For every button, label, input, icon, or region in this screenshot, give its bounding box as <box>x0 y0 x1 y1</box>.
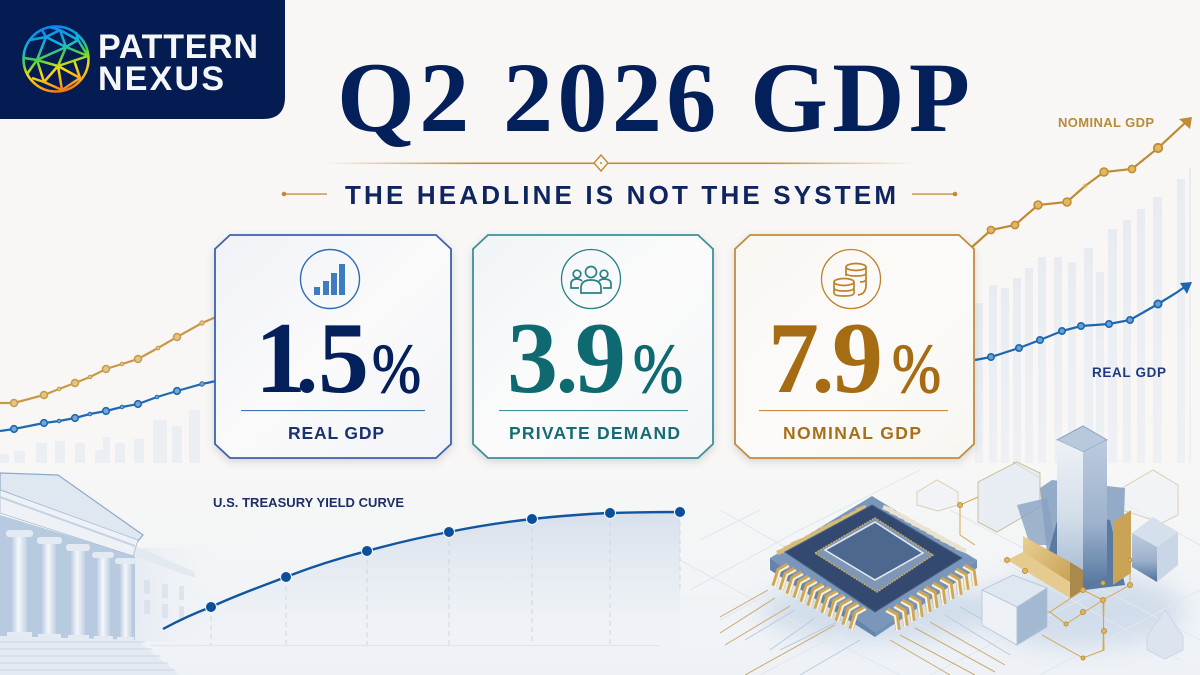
circuit nodes <box>958 502 1132 660</box>
value: 1.5%: . <box>296 315 318 412</box>
left background bars <box>0 410 200 463</box>
left line chart: nominal and real GDP <box>0 317 216 432</box>
right cube <box>1132 517 1178 582</box>
value: 1.5%: % <box>372 331 421 408</box>
subtitle: THE HEADLINE IS NOT THE SYSTEM <box>345 180 896 210</box>
chip substrate <box>770 496 977 637</box>
icon: coin stacks <box>822 250 880 308</box>
value: 7.9%: % <box>892 331 941 408</box>
gold circuit lines <box>960 462 1130 658</box>
logo wordmark <box>98 28 258 98</box>
illustration: circuit floor <box>680 470 1200 675</box>
chart title: U.S. TREASURY YIELD CURVE <box>213 495 404 510</box>
value: 1.5% <box>255 302 421 415</box>
icon: people <box>562 250 620 308</box>
yield curve chart <box>150 495 686 646</box>
value: 1.5%: 5 <box>318 302 369 415</box>
right background bars <box>975 168 1191 463</box>
tall glass tower <box>1057 426 1107 592</box>
card label: PRIVATE DEMAND <box>509 423 680 443</box>
gold series <box>0 317 216 406</box>
left glass cube <box>978 462 1040 532</box>
blue series <box>0 381 216 432</box>
value: 7.9%: 7 <box>768 302 819 415</box>
value: 3.9%: % <box>633 331 683 408</box>
columns <box>6 530 136 642</box>
chip traces <box>720 590 1020 675</box>
icon: bar chart <box>300 250 360 308</box>
value: 3.9%: 9 <box>575 302 626 415</box>
illustration: microchip <box>720 496 1020 675</box>
gold panels <box>1007 510 1131 598</box>
illustration: glass city blocks <box>917 426 1183 660</box>
label: nominal GDP: NOMINAL GDP <box>1058 115 1154 130</box>
steps <box>0 636 180 675</box>
card label: NOMINAL GDP <box>783 423 921 443</box>
logo panel <box>0 0 285 119</box>
value: 3.9%: . <box>556 315 578 412</box>
icon: globe mesh <box>24 26 88 92</box>
value: 3.9% <box>507 302 683 415</box>
value: 7.9%: 9 <box>832 302 883 415</box>
chip pins: front edges <box>774 565 975 631</box>
front glass cube <box>982 575 1047 645</box>
illustration: treasury building <box>0 473 215 675</box>
subtitle ornaments <box>282 192 957 196</box>
label: real GDP: REAL GDP <box>1092 365 1166 380</box>
blue series with arrow <box>975 282 1192 360</box>
small crystal cube <box>1147 610 1183 659</box>
back pale cubes <box>917 470 1178 523</box>
chip die <box>815 518 933 592</box>
card: real GDP <box>215 235 451 458</box>
title: Q2 2026 GDP <box>337 42 970 153</box>
chip body <box>785 505 962 612</box>
card: private demand <box>473 235 713 458</box>
logo wordmark: NEXUS <box>98 60 224 98</box>
value: 7.9%: . <box>812 315 834 412</box>
logo wordmark: PATTERN <box>98 28 258 66</box>
right line chart: nominal and real GDP <box>972 117 1192 360</box>
value: 1.5%: 1 <box>255 302 306 415</box>
value: 7.9% <box>768 302 941 415</box>
dark blocks behind tower <box>1017 480 1125 590</box>
title divider with diamond <box>325 155 915 171</box>
card: nominal GDP <box>735 235 974 458</box>
gold series with arrow <box>972 117 1192 247</box>
card label: REAL GDP <box>288 423 384 443</box>
value: 3.9%: 3 <box>507 302 558 415</box>
pediment and entablature <box>0 473 143 556</box>
chip pins: rear edges <box>777 507 966 553</box>
